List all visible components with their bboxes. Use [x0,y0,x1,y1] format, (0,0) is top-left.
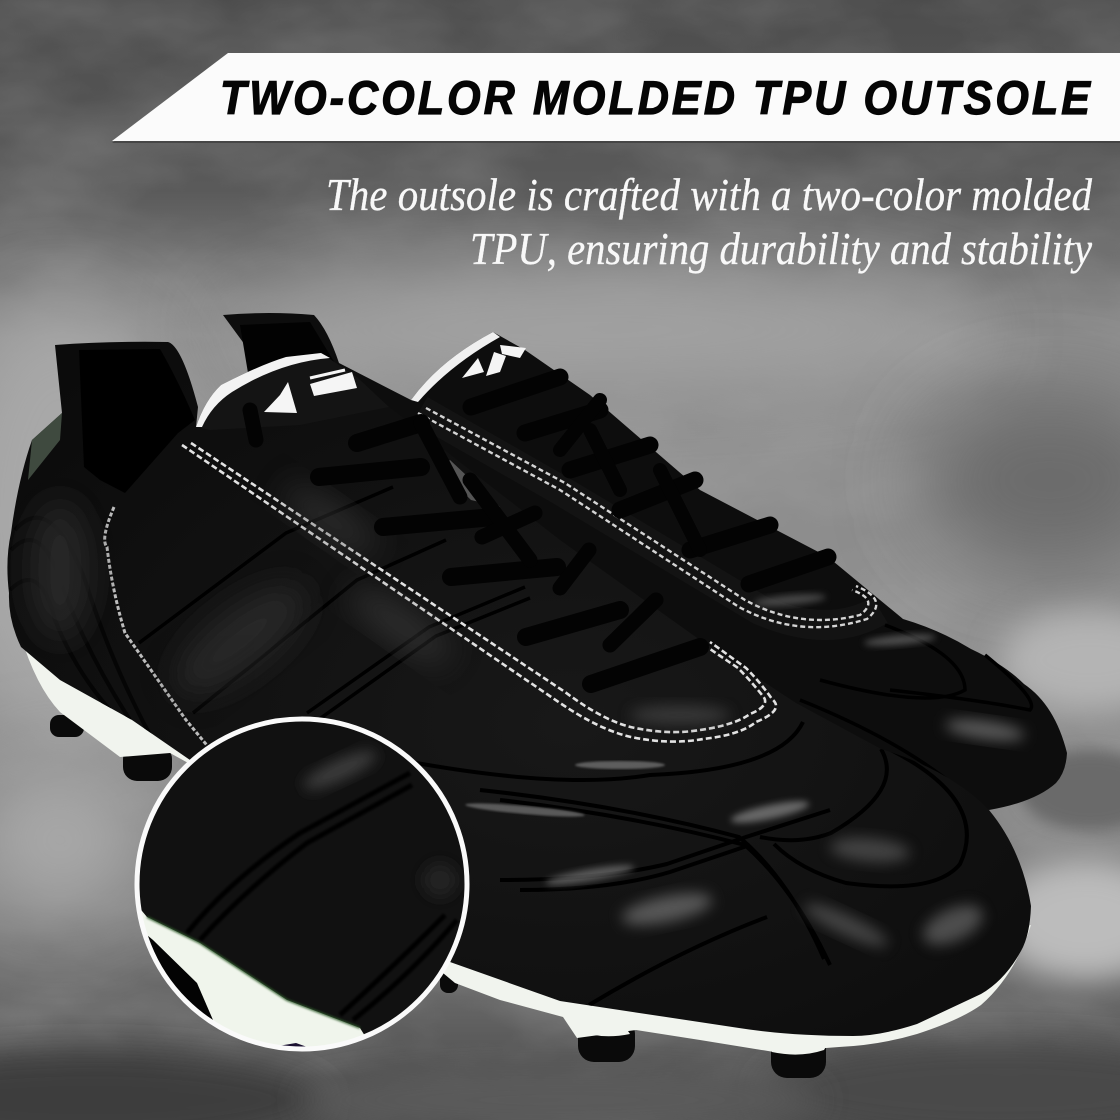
product: near football boot [7,342,1031,1078]
inset: white sole band [142,910,364,1046]
laces [250,410,700,684]
heel collar [79,349,195,493]
subtitle text block [326,169,1093,274]
inset: stitching seams [187,773,457,1020]
stitching [105,507,215,755]
banner: white title ribbon [112,53,1120,143]
panel seams [139,487,530,720]
heel counter swirls [8,588,152,734]
title: TWO-COLOR MOLDED TPU OUTSOLE [220,71,1092,124]
gray tongue patch [440,460,500,507]
tongue with logo [196,353,389,430]
far boot laces [471,377,828,584]
vamp seams [400,722,967,1005]
inset: black stud shadow [148,936,213,1020]
logo [264,372,357,413]
product: far football boot [223,313,1067,810]
inset: magnified outsole detail circle [135,719,467,1060]
leather highlights [30,475,989,954]
white outsole and studs [14,610,1031,1078]
